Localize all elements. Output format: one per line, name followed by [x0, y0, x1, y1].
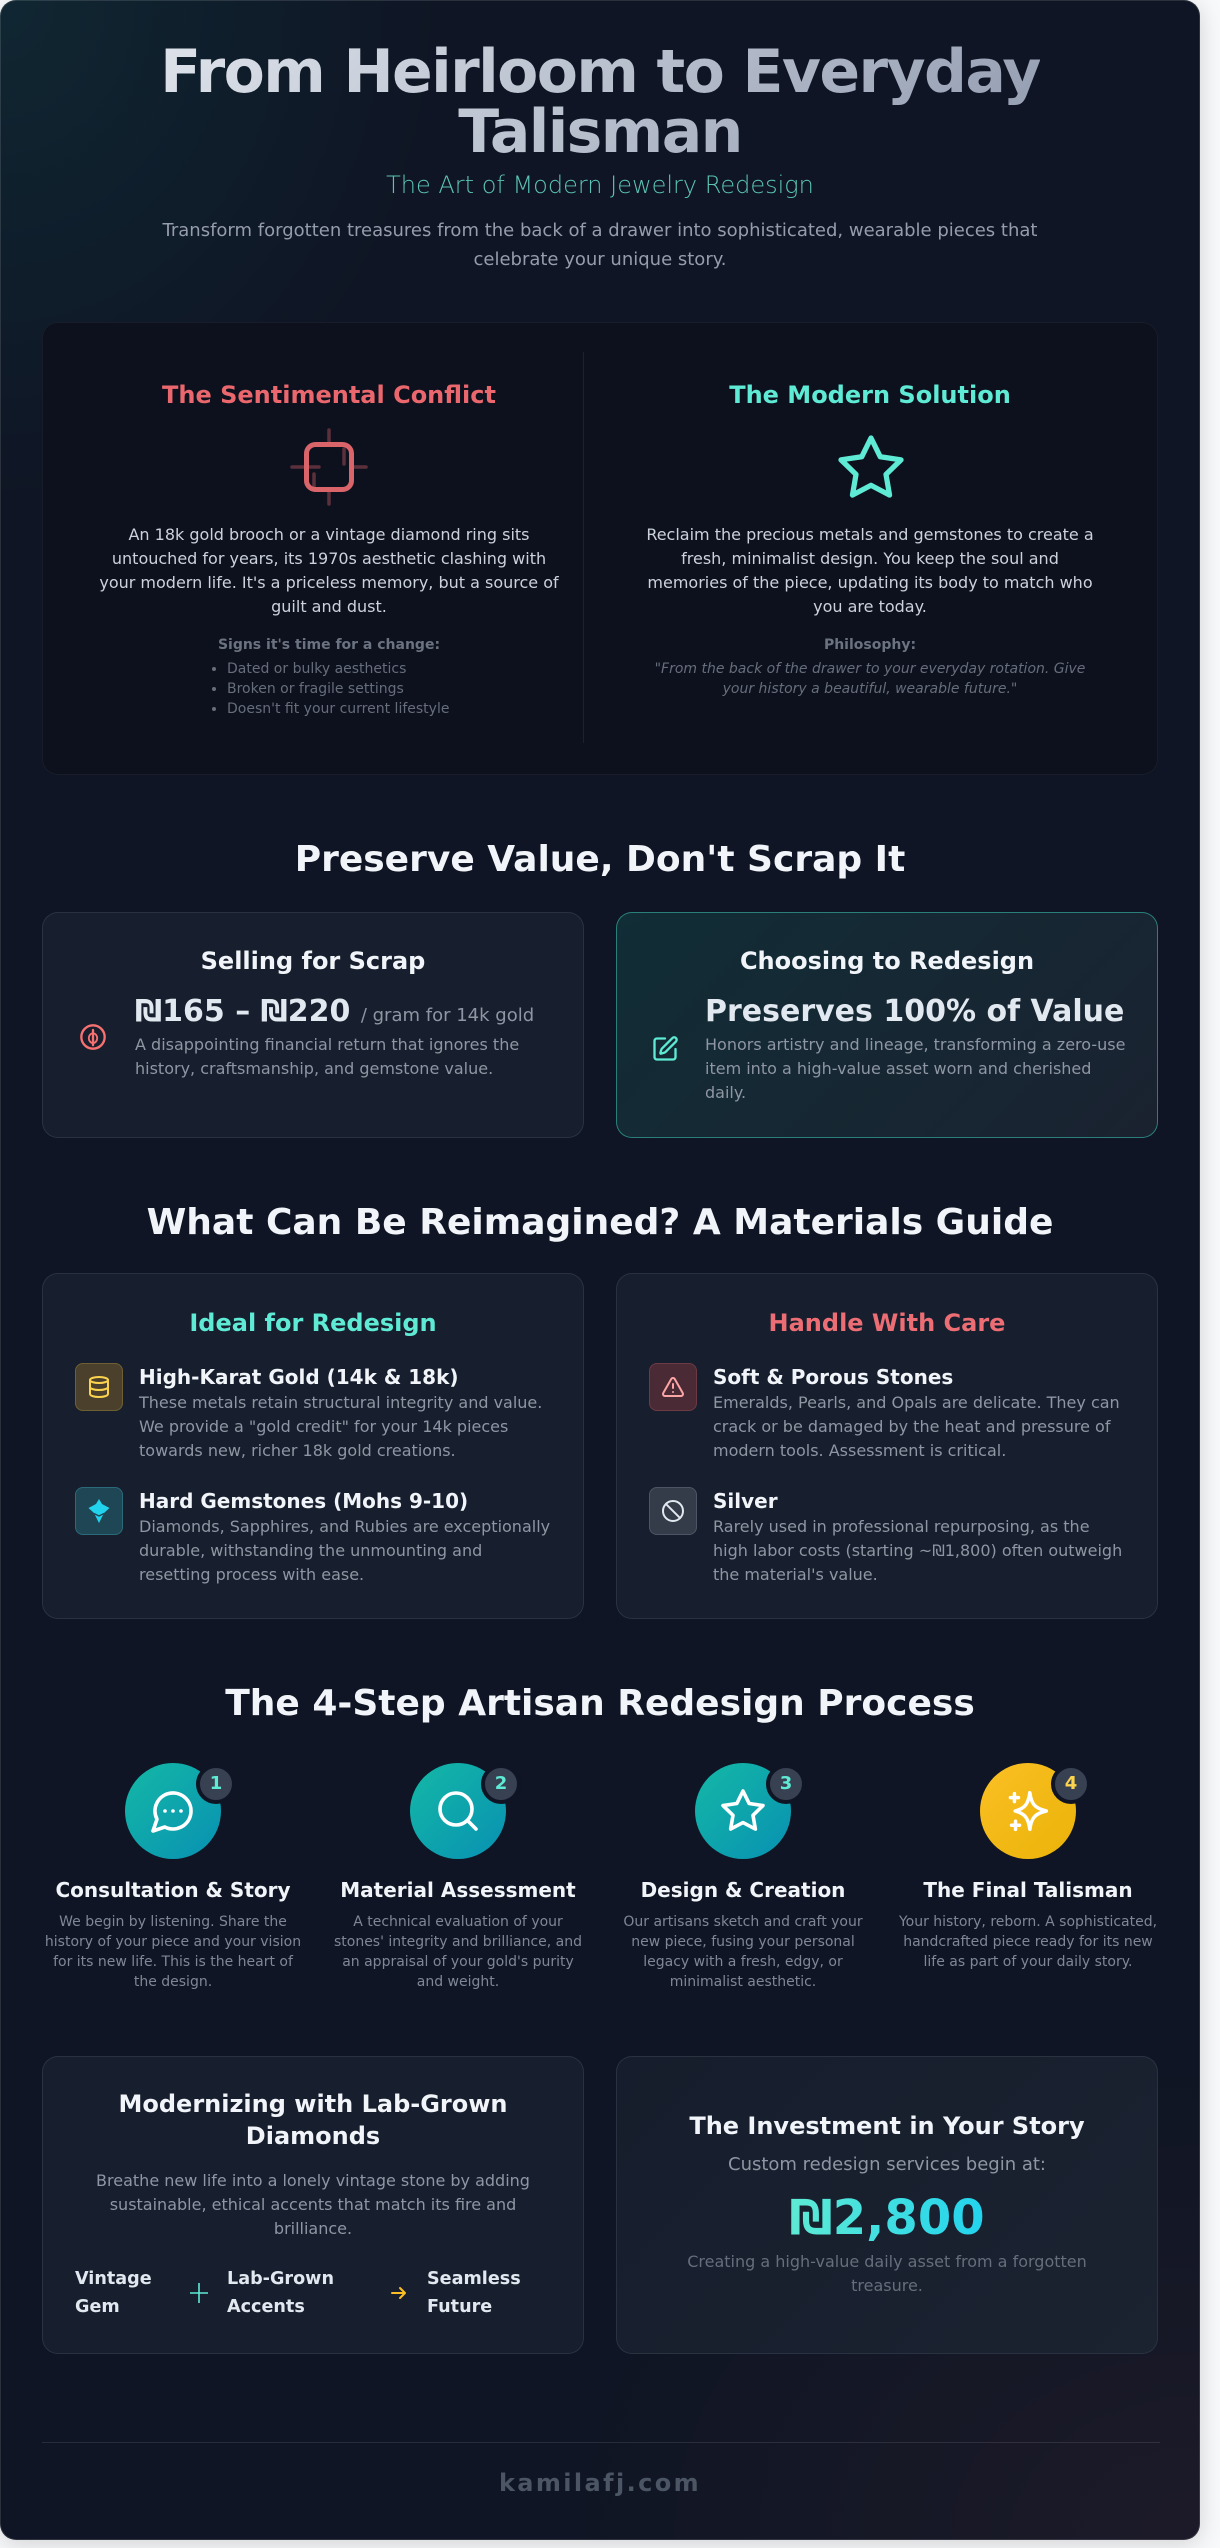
item text: soft stones: Emeralds, Pearls, and Opals are delicate. They can [713, 1393, 1120, 1412]
footer: kamilafj.com [499, 2469, 701, 2497]
caption: Creating a high-value daily asset from a forgotten [687, 2252, 1087, 2271]
step text [334, 1914, 582, 1990]
step text: an appraisal of your gold's purity [342, 1954, 574, 1970]
step text: minimalist aesthetic. [670, 1974, 816, 1990]
step title: Design & Creation [641, 1878, 845, 1902]
quote: philosophy: "From the back of the drawer to your everyday rotation. Give [655, 661, 1085, 677]
step text: new piece, fusing your personal [631, 1934, 855, 1950]
card heading: Modernizing with Lab-Grown [118, 2090, 508, 2118]
item text: soft stones [713, 1393, 1120, 1460]
icon: warning [649, 1363, 697, 1411]
text: solution description [646, 525, 1094, 616]
step text [623, 1914, 863, 1990]
item text: soft stones: modern tools. Assessment is critical. [713, 1441, 1006, 1460]
description: Honors artistry and lineage, transforming a zero-use [705, 1035, 1125, 1054]
icon: gemstone [75, 1487, 123, 1535]
item text: silver [713, 1517, 1122, 1584]
text: conflict description: An 18k gold brooch or a vintage diamond ring sits [128, 525, 530, 544]
label: seamless future: Seamless [427, 2269, 521, 2289]
icon: pen [653, 1036, 678, 1061]
title [160, 37, 1040, 167]
description: brilliance. [274, 2219, 352, 2238]
step text: A technical evaluation of your [353, 1914, 563, 1930]
description: daily. [705, 1083, 746, 1102]
icon: chat bubble [125, 1763, 221, 1859]
subheading: signs: Signs it's time for a change: [218, 637, 440, 653]
list: signs: Dated or bulky aesthetics [227, 661, 406, 677]
text: conflict description: your modern life. It's a priceless memory, but a source of [99, 573, 559, 592]
item text: soft stones: crack or be damaged by the heat and pressure of [713, 1417, 1110, 1436]
text: conflict description [99, 525, 559, 616]
panel: selling for scrap [42, 912, 584, 1138]
description: sustainable, ethical accents that match its fire and [110, 2195, 516, 2214]
heading: materials guide: What Can Be Reimagined? A Materials Guide [147, 1202, 1053, 1243]
heading: process: The 4-Step Artisan Redesign Process [225, 1683, 975, 1724]
text: solution description: fresh, minimalist design. You keep the soul and [681, 549, 1059, 568]
icon: arrow [391, 2287, 406, 2299]
label: vintage gem [75, 2269, 152, 2317]
item text: gold: We provide a "gold credit" for your 14k pieces [139, 1417, 508, 1436]
list: signs [212, 661, 449, 717]
icon: coin [80, 1024, 106, 1050]
badge 4: 4 [1065, 1773, 1077, 1794]
badge 4 [1051, 1764, 1091, 1804]
icon: magnifier [410, 1763, 506, 1859]
panel: ideal for redesign [42, 1273, 584, 1619]
item text: silver: high labor costs (starting ~₪1,800) often outweigh [713, 1541, 1122, 1560]
value statement: Preserves 100% of Value [705, 994, 1124, 1029]
description [96, 2171, 530, 2238]
icon: plus [190, 2283, 208, 2303]
badge 3: 3 [780, 1773, 792, 1794]
intro text [162, 220, 1037, 270]
price: ₪2,800 [789, 2190, 985, 2246]
label: vintage gem: Gem [75, 2297, 120, 2317]
item text: gemstones: durable, withstanding the unmounting and [139, 1541, 482, 1560]
heading: the sentimental conflict: The Sentimental Conflict [162, 381, 496, 409]
item text: gold [138, 1393, 542, 1460]
label: seamless future [427, 2269, 521, 2317]
description: item into a high-value asset worn and cherished [705, 1059, 1091, 1078]
item text: gemstones: resetting process with ease. [139, 1565, 364, 1584]
step 1 [45, 1763, 301, 1990]
panel: choosing to redesign [616, 912, 1158, 1138]
step title: Consultation & Story [55, 1878, 291, 1902]
price: ₪165 – ₪220 / gram for 14k gold [135, 994, 534, 1029]
label: vintage gem: Vintage [75, 2269, 152, 2289]
panel: investment [616, 2056, 1158, 2354]
step text: handcrafted piece ready for its new [903, 1934, 1153, 1950]
badge 1: 1 [210, 1773, 222, 1794]
text: solution description: memories of the piece, updating its body to match who [647, 573, 1093, 592]
badge 2 [481, 1764, 521, 1804]
item text: gemstones [139, 1517, 550, 1584]
card heading: Handle With Care [769, 1309, 1005, 1337]
subtitle: The Art of Modern Jewelry Redesign [386, 171, 814, 199]
card heading: The Investment in Your Story [689, 2112, 1085, 2140]
step title: Material Assessment [340, 1878, 576, 1902]
step text: stones' integrity and brilliance, and [334, 1934, 582, 1950]
intro text: celebrate your unique story. [473, 249, 727, 270]
panel: conflict and solution [42, 322, 1158, 775]
item text: silver: the material's value. [713, 1565, 878, 1584]
badge 3 [766, 1764, 806, 1804]
item text: gold: These metals retain structural integrity and value. [139, 1393, 542, 1412]
description: history, craftsmanship, and gemstone value. [135, 1059, 493, 1078]
description [705, 1035, 1125, 1102]
heading: the modern solution: The Modern Solution [729, 381, 1011, 409]
step text [45, 1914, 301, 1990]
icon: gold database [75, 1363, 123, 1411]
heading: preserve value: Preserve Value, Don't Scrap It [295, 839, 905, 880]
icon: star [838, 435, 904, 498]
card heading: Choosing to Redesign [740, 947, 1034, 975]
card heading: Selling for Scrap [201, 947, 425, 975]
label: seamless future: Future [427, 2297, 492, 2317]
quote: philosophy [655, 661, 1085, 697]
caption [687, 2252, 1087, 2295]
card heading: Diamonds [246, 2122, 380, 2150]
list: signs: Broken or fragile settings [227, 681, 404, 697]
description: Breathe new life into a lonely vintage stone by adding [96, 2171, 530, 2190]
step 2 [334, 1763, 582, 1990]
step text: history of your piece and your vision [45, 1934, 301, 1950]
item title: gold: High-Karat Gold (14k & 18k) [139, 1365, 459, 1389]
panel: handle with care [616, 1273, 1158, 1619]
step text [899, 1914, 1157, 1970]
icon: sparkles [980, 1763, 1076, 1859]
card heading [118, 2090, 508, 2150]
label: lab-grown accents: Accents [227, 2297, 305, 2317]
step text: the design. [134, 1974, 212, 1990]
list: signs: Doesn't fit your current lifestyle [227, 701, 449, 717]
item text: gold: towards new, richer 18k gold creations. [139, 1441, 456, 1460]
badge 1 [196, 1764, 236, 1804]
step text: life as part of your daily story. [924, 1954, 1132, 1970]
step 3 [623, 1763, 863, 1990]
item text: gemstones: Diamonds, Sapphires, and Rubies are exceptionally [139, 1517, 550, 1536]
step text: We begin by listening. Share the [59, 1914, 287, 1930]
label: lab-grown accents [227, 2269, 334, 2317]
item title: soft stones: Soft & Porous Stones [713, 1365, 953, 1389]
label: services begin: Custom redesign services begin at: [728, 2154, 1046, 2175]
icon: ban [649, 1487, 697, 1535]
step 4 [899, 1763, 1157, 1970]
text: conflict description: guilt and dust. [271, 597, 387, 616]
icon: brooch frame [290, 428, 368, 506]
description [135, 1035, 519, 1078]
text: solution description: Reclaim the precious metals and gemstones to create a [646, 525, 1094, 544]
description: A disappointing financial return that ignores the [135, 1035, 519, 1054]
text: conflict description: untouched for years, its 1970s aesthetic clashing with [112, 549, 546, 568]
label: lab-grown accents: Lab-Grown [227, 2269, 334, 2289]
text: solution description: you are today. [813, 597, 927, 616]
item title: gemstones: Hard Gemstones (Mohs 9-10) [139, 1489, 468, 1513]
step title: The Final Talisman [923, 1878, 1133, 1902]
step text: for its new life. This is the heart of [53, 1954, 293, 1970]
step text: and weight. [417, 1974, 499, 1990]
subheading: philosophy: Philosophy: [824, 637, 916, 653]
caption: treasure. [851, 2276, 923, 2295]
step text: Our artisans sketch and craft your [623, 1914, 863, 1930]
title: From Heirloom to Everyday [160, 37, 1040, 107]
step text: legacy with a fresh, edgy, or [643, 1954, 843, 1970]
intro text: Transform forgotten treasures from the back of a drawer into sophisticated, wearable pieces that [163, 220, 1037, 241]
panel: lab-grown diamonds [42, 2056, 584, 2354]
icon: star [695, 1763, 791, 1859]
item title: silver: Silver [713, 1489, 778, 1513]
item text: silver: Rarely used in professional repurposing, as the [713, 1517, 1090, 1536]
title: Talisman [458, 97, 742, 167]
badge 2: 2 [495, 1773, 507, 1794]
step text: Your history, reborn. A sophisticated, [899, 1914, 1157, 1930]
quote: philosophy: your history a beautiful, wearable future." [723, 681, 1017, 697]
card heading: Ideal for Redesign [189, 1309, 437, 1337]
